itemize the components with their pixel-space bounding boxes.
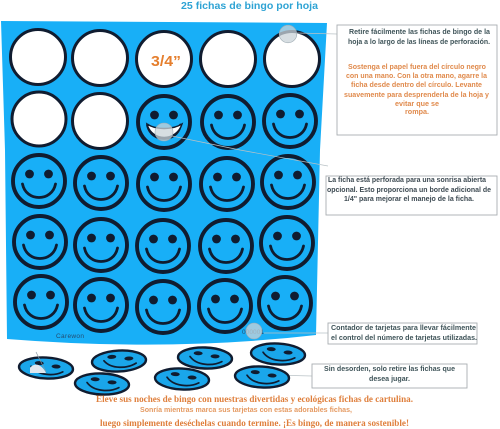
callout: removing chips: con una mano. Con la otra mano, agarre la: [346, 71, 488, 80]
callout: open smile: opcional. Esto proporciona un borde adicional de: [327, 185, 491, 194]
row of removed chips 2: [12, 92, 128, 148]
row of removed chips 1: [10, 30, 320, 86]
callout: no mess: Sin desorden, solo retire las fichas que: [324, 364, 455, 373]
card counter: 000001: [242, 329, 264, 336]
leader lines: [172, 33, 337, 376]
callout: removing chips: ficha desde dentro del círculo. Levante: [351, 80, 482, 89]
callout: card counter: Contador de tarjetas para llevar fácilmente: [331, 323, 476, 332]
callout: open smile: 1/4" para mejorar el manejo de la ficha.: [344, 194, 474, 203]
callout: no mess: desea jugar.: [369, 374, 410, 383]
open smile punch-out: [147, 124, 182, 138]
callout: removing chips: evitar que se: [395, 99, 439, 108]
callout: card counter: el control del número de tarjetas utilizadas.: [331, 333, 477, 342]
callout: removing chips: suavemente para desprenderla de la hoja y: [344, 90, 490, 99]
smiley faces: [13, 95, 316, 333]
closing message: [96, 395, 413, 429]
callout: removing chips: Retire fácilmente las fichas de bingo de la: [349, 27, 491, 36]
loose chips: [18, 342, 306, 395]
highlight circles: [155, 25, 297, 381]
brand label: Carewon: [56, 333, 84, 340]
callout: no mess: [312, 364, 467, 388]
callout: open smile: La ficha está perforada para una sonrisa abierta: [328, 175, 487, 184]
sheet background: [1, 21, 327, 345]
closing message: Sonría mientras marca sus tarjetas con estas adorables fichas,: [140, 405, 352, 414]
callout: open smile: [326, 175, 497, 215]
callout: removing chips: rompa.: [405, 107, 429, 116]
closing message: Eleve sus noches de bingo con nuestras divertidas y ecológicas fichas de cartulina.: [96, 395, 413, 405]
size label: 3/4”: [151, 53, 181, 70]
closing message: luego simplemente deséchelas cuando termine. ¡Es bingo, de manera sostenible!: [100, 419, 409, 429]
callout: removing chips: Sostenga el papel fuera del círculo negro: [348, 62, 486, 71]
callout: removing chips: [337, 25, 497, 135]
title: 25 fichas de bingo por hoja: [181, 0, 318, 12]
panel: bingo chip sheet: [1, 21, 327, 345]
callout: removing chips: hoja a lo largo de las líneas de perforación.: [348, 37, 490, 46]
callout: card counter: [328, 323, 477, 344]
